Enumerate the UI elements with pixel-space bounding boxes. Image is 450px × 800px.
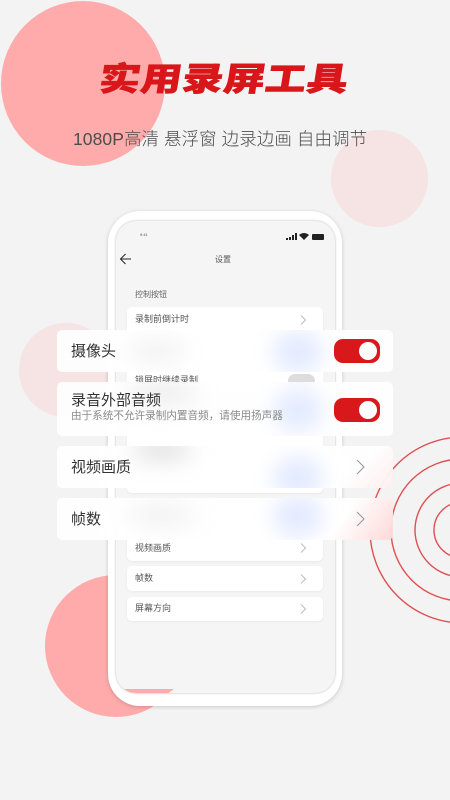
- settings row: video quality: [127, 534, 323, 561]
- pale circle left: [19, 323, 113, 417]
- settings card: recording: [127, 430, 323, 493]
- subtitle: 1080P高清 悬浮窗 边录边画 自由调节: [73, 129, 367, 149]
- row label: 屏幕方向: [135, 603, 171, 613]
- settings row: lock screen: [127, 347, 323, 387]
- chevron: [300, 315, 306, 325]
- chevron: [356, 512, 365, 526]
- blue blur: [273, 330, 323, 374]
- row label: 锁屏时继续录制: [135, 375, 198, 385]
- overlay card: camera: [57, 330, 393, 372]
- audio note: 由于系统不允许录制内置音频，请使用扬声器: [71, 410, 283, 422]
- section label: 控制按钮: [135, 290, 167, 299]
- blue blur: [273, 494, 323, 538]
- back arrow: [120, 254, 131, 264]
- chevron: [300, 604, 306, 614]
- settings row: frame rate: [127, 566, 323, 591]
- grey blur: [132, 438, 192, 460]
- row label: 视频画质: [135, 543, 171, 553]
- quality label: 视频画质: [71, 459, 131, 476]
- grey blur: [127, 382, 197, 406]
- audio toggle: [334, 398, 380, 422]
- settings row: orientation: [127, 597, 323, 621]
- settings row: countdown: [127, 307, 323, 347]
- phone mockup: [108, 211, 342, 706]
- small toggle: [288, 374, 315, 388]
- grey blur: [127, 504, 197, 526]
- frame rate label: 帧数: [71, 511, 101, 528]
- camera label: 摄像头: [71, 343, 116, 360]
- row label: 录制前倒计时: [135, 314, 189, 324]
- pale circle top right: [331, 130, 428, 227]
- audio label: 录音外部音频: [71, 392, 161, 409]
- title: 实用录屏工具: [96, 52, 353, 100]
- large pink circle: [1, 1, 165, 166]
- camera toggle: [334, 339, 380, 363]
- overlay card: frame rate: [57, 498, 393, 540]
- blue blur: [273, 388, 323, 432]
- chevron: [300, 574, 306, 584]
- grey blur: [127, 340, 187, 362]
- status bar icons: [286, 233, 324, 240]
- blue blur: [273, 456, 323, 500]
- chevron: [356, 460, 365, 474]
- screen heading: 设置: [215, 255, 231, 264]
- overlay card: external audio: [57, 382, 393, 436]
- status bar time: 9:41: [140, 232, 148, 237]
- overlay card: video quality: [57, 446, 393, 488]
- phone screen: [116, 221, 335, 693]
- pink sliver at the bottom of the screen: [120, 689, 174, 693]
- chevron: [300, 543, 306, 553]
- pink circle bottom left: [45, 575, 187, 717]
- row label: 帧数: [135, 573, 153, 583]
